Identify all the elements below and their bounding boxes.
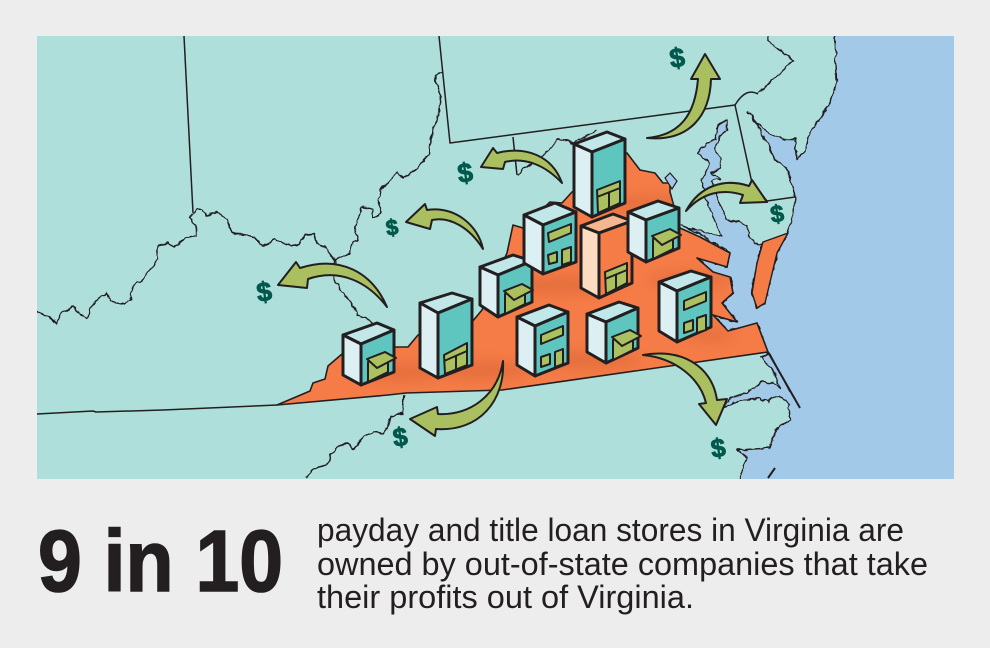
soft building shadows: [350, 196, 735, 381]
arrow: to Kentucky: [278, 262, 387, 307]
dollar signs: $: [668, 42, 687, 74]
dollar signs: $: [709, 432, 728, 464]
description text: payday and title loan stores in Virginia are: [317, 512, 904, 548]
wiggly river borders: [36, 36, 793, 478]
Virginia eastern shore: [752, 233, 788, 308]
building 3: awning store: [480, 255, 533, 317]
building 2: tall office: [420, 293, 472, 378]
building 7: awning store: [628, 201, 681, 262]
arrow: to North Carolina west: [410, 361, 503, 436]
arrow: to North Carolina east: [643, 353, 727, 425]
description text: owned by out-of-state companies that take: [317, 546, 928, 582]
arrow: to Ohio: [406, 204, 483, 249]
dollar signs: $: [255, 276, 274, 308]
dollar signs: [255, 42, 786, 464]
dollar signs: $: [391, 421, 410, 453]
building 4: windows office: [524, 203, 576, 274]
description text: their profits out of Virginia.: [317, 579, 694, 615]
arrow: to Pennsylvania west: [481, 148, 562, 183]
arrow: to Pennsylvania: [647, 54, 720, 138]
building 1: small awning store: [343, 323, 396, 385]
dollar signs: $: [384, 214, 400, 241]
Washington DC: [665, 173, 677, 189]
water: ocean and bays: [681, 30, 970, 495]
map panel: [36, 30, 970, 495]
dollar signs: $: [456, 157, 475, 189]
description text: [317, 512, 928, 615]
headline stat: 9 in 10: [38, 513, 283, 610]
building 5: tall tower: [574, 132, 625, 217]
building 8: windows office: [517, 305, 568, 376]
arrow: to Delaware: [686, 180, 767, 211]
straight state border lines: [36, 36, 800, 478]
building 9: awning store: [587, 302, 641, 363]
dollar signs: $: [769, 200, 786, 229]
building 10: windows office: [659, 271, 711, 342]
Virginia state shape: [277, 153, 768, 405]
building 6: orange highlighted tower: [581, 214, 632, 298]
